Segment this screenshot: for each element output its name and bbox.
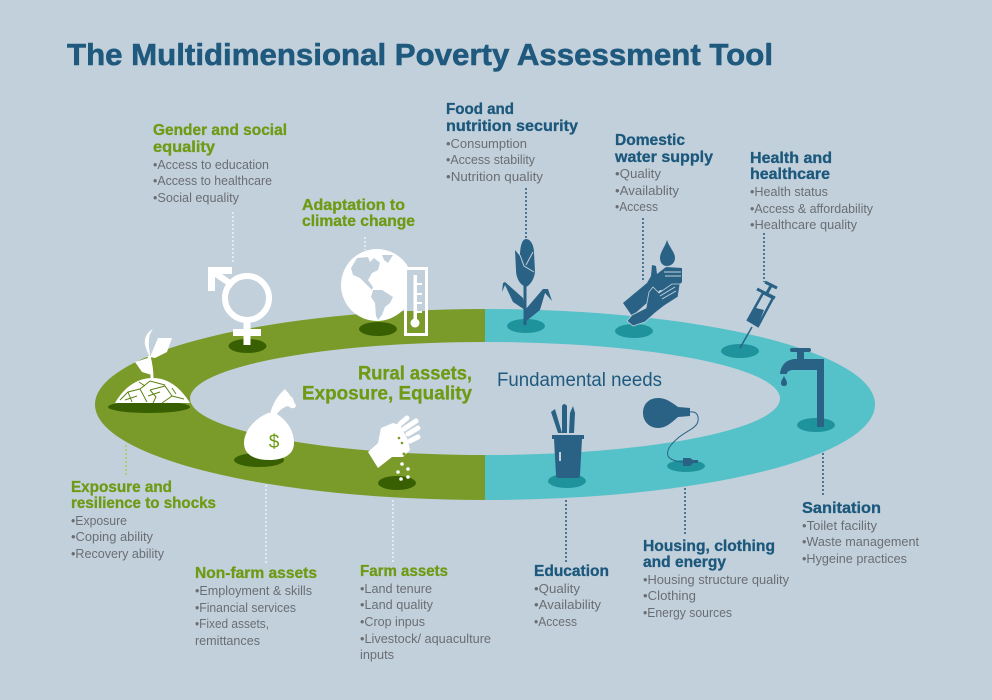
ring: right teal half (485, 309, 875, 500)
dotted connector: sanitation (822, 453, 824, 497)
text block: sanitation (802, 500, 919, 566)
dotted connector: housing (684, 488, 686, 535)
text block: housing, clothing and energy (643, 538, 789, 620)
icon: pencil cup (548, 404, 586, 488)
text block: food and nutrition security: nutrition security (446, 118, 578, 135)
icon: hands with water drop (615, 240, 682, 338)
dotted connector: water (642, 218, 644, 282)
text block: housing, clothing and energy: •Clothing (643, 588, 696, 603)
text block: housing, clothing and energy: Housing, clothing (643, 538, 775, 555)
text block: education: •Availability (534, 597, 602, 612)
icon: syringe (721, 282, 777, 358)
icon: gender symbol (208, 267, 269, 353)
center label: rural assets (302, 364, 472, 404)
ring: left green half (95, 309, 485, 500)
text block: adaptation to climate change: Adaptation to (302, 197, 405, 214)
text block: non-farm assets: •Fixed assets, (195, 616, 269, 631)
text block: education: •Quality (534, 581, 581, 596)
text block: food and nutrition security: •Consumption (446, 136, 527, 151)
text block: health and healthcare: •Health status (750, 184, 828, 199)
text block: housing, clothing and energy: and energy (643, 554, 726, 571)
text block: food and nutrition security (446, 101, 578, 184)
text block: food and nutrition security: Food and (446, 101, 514, 118)
text block: education (534, 563, 609, 629)
text block: gender and social equality: equality (153, 139, 215, 156)
icon: sprout on cracked soil (108, 329, 190, 413)
dotted connector: gender (232, 212, 234, 262)
dotted connector: adaptation (364, 237, 366, 250)
text block: food and nutrition security: •Access stability (446, 152, 535, 167)
icon: water tap (780, 348, 835, 432)
icon: money bag (234, 389, 296, 467)
text block: exposure and resilience: •Coping ability (71, 529, 153, 544)
text block: non-farm assets: Non-farm assets (195, 565, 317, 582)
text block: domestic water supply (614, 132, 713, 214)
icon: globe and thermometer (341, 249, 427, 336)
text block: sanitation: •Hygeine practices (802, 551, 907, 566)
text block: farm assets: •Land tenure (360, 581, 432, 596)
center label: rural assets: Rural assets, (358, 364, 472, 384)
text block: exposure and resilience (71, 479, 216, 561)
text block: domestic water supply: •Access (615, 199, 658, 214)
text block: domestic water supply: •Quality (615, 166, 662, 181)
text block: exposure and resilience: •Recovery ability (71, 546, 164, 561)
text block: health and healthcare: •Access & affordability (750, 201, 873, 216)
text block: health and healthcare: healthcare (750, 166, 830, 183)
text block: housing, clothing and energy: •Housing structure quality (643, 572, 789, 587)
text block: sanitation: Sanitation (802, 500, 881, 517)
text block: food and nutrition security: •Nutrition quality (446, 169, 544, 184)
text block: gender and social equality: •Access to healthcare (153, 173, 272, 188)
title: The Multidimensional Poverty Assessment Tool (67, 37, 773, 72)
dotted connector: non-farm (265, 485, 267, 563)
text block: education: •Access (534, 614, 577, 629)
text block: exposure and resilience: •Exposure (71, 513, 127, 528)
dotted connector: farm (392, 500, 394, 563)
text block: farm assets: •Land quality (360, 597, 433, 612)
dotted connector: exposure (125, 445, 127, 477)
text block: non-farm assets: •Employment & skills (195, 583, 312, 598)
dotted connector: food (525, 188, 527, 238)
icon: money bag: $ (269, 432, 280, 453)
icon: hand sowing seeds (368, 418, 418, 490)
text block: health and healthcare: •Healthcare quality (750, 217, 857, 232)
text block: exposure and resilience: Exposure and (71, 479, 172, 496)
text block: farm assets: •Crop inpus (360, 614, 425, 629)
text block: domestic water supply: Domestic (615, 132, 685, 149)
text block: adaptation to climate change: climate change (302, 213, 415, 230)
text block: gender and social equality: Gender and social (153, 122, 287, 139)
center label: fundamental needs: Fundamental needs (497, 370, 662, 391)
text block: domestic water supply: •Availablity (615, 183, 680, 198)
text block: sanitation: •Waste management (802, 534, 919, 549)
dotted connector: health (763, 233, 765, 282)
dotted connector: education (565, 500, 567, 563)
text block: domestic water supply: water supply (614, 149, 713, 166)
text block: adaptation to climate change (302, 197, 415, 230)
text block: exposure and resilience: resilience to shocks (71, 495, 216, 512)
icon: light bulb and plug (643, 398, 705, 472)
text block: farm assets: inputs (360, 647, 394, 662)
text block: health and healthcare: Health and (750, 150, 832, 167)
icon: corn plant (502, 239, 552, 333)
text block: education: Education (534, 563, 609, 580)
text block: gender and social equality (153, 122, 287, 205)
text block: non-farm assets: remittances (195, 633, 260, 648)
text block: farm assets: Farm assets (360, 563, 448, 580)
text block: housing, clothing and energy: •Energy sources (643, 605, 732, 620)
text block: farm assets: •Livestock/ aquaculture (360, 631, 491, 646)
text block: gender and social equality: •Access to education (153, 157, 269, 172)
text block: health and healthcare (750, 150, 873, 232)
text block: farm assets (360, 563, 491, 662)
text block: non-farm assets: •Financial services (195, 600, 296, 615)
text block: sanitation: •Toilet facility (802, 518, 877, 533)
text block: non-farm assets (195, 565, 317, 648)
center label: rural assets: Exposure, Equality (302, 384, 472, 404)
text block: gender and social equality: •Social equality (153, 190, 239, 205)
